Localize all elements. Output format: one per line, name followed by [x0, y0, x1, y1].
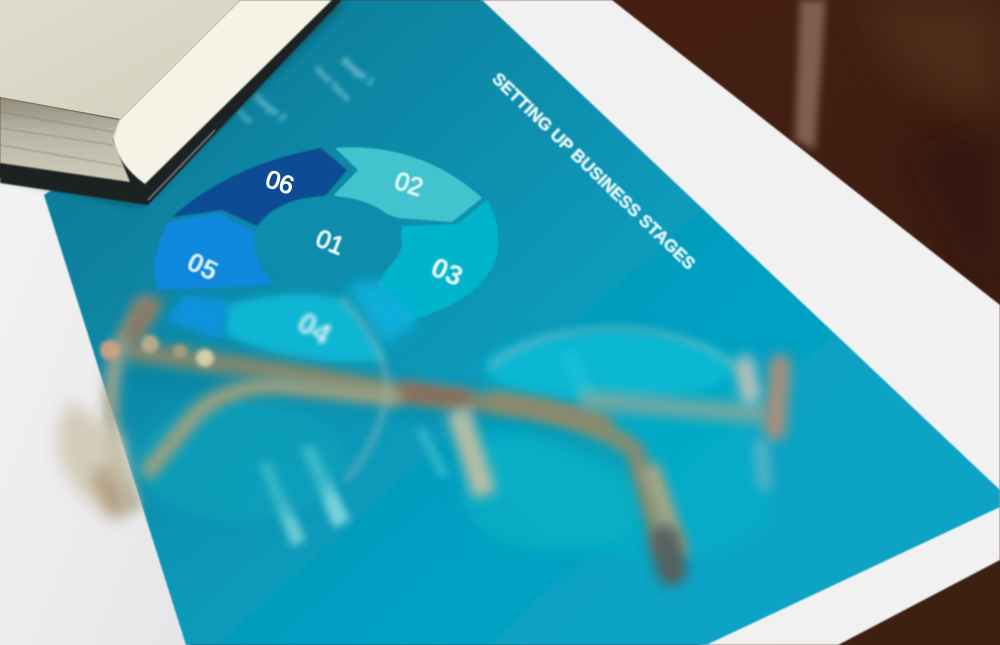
glasses — [58, 298, 780, 580]
pie chart: business stages — [155, 147, 498, 322]
segment 05 — [155, 213, 275, 290]
right lens lower bar — [580, 400, 770, 415]
label 05: 05 — [182, 246, 223, 287]
label 02: 02 — [391, 167, 426, 202]
left white sheet — [0, 178, 190, 645]
left temple arm — [145, 386, 400, 475]
page stack top — [0, 0, 240, 119]
segment 01 centre — [254, 196, 402, 286]
page stack front — [0, 97, 130, 182]
small blurred captions: Stage 1 — [338, 55, 376, 88]
right temple tip — [650, 465, 680, 555]
cover light edge — [148, 130, 215, 200]
page edge side — [113, 0, 332, 184]
rivets — [100, 340, 120, 360]
segment 02 — [334, 147, 482, 222]
small blurred captions: Stage 2 — [250, 91, 288, 124]
book cover — [0, 0, 342, 205]
white paper margin — [300, 0, 1000, 645]
lens left lower tint — [135, 400, 345, 520]
left lens rim — [340, 298, 388, 480]
label 01: 01 — [312, 225, 348, 261]
left temple tip on white sheet — [58, 400, 130, 512]
blurred captions under the glasses — [258, 350, 597, 547]
label 03: 03 — [427, 251, 468, 292]
title: SETTING UP BUSINESS STAGES — [488, 68, 700, 274]
small blurred captions: text — [234, 106, 255, 127]
chart numbers — [182, 165, 468, 352]
label 06: 06 — [262, 165, 297, 200]
small blurred captions — [234, 55, 376, 127]
segment 06 — [172, 148, 347, 226]
book shadow — [0, 0, 345, 208]
small blurred captions: text here — [312, 64, 353, 105]
right temple arm — [490, 400, 665, 555]
lens right tint — [480, 332, 770, 562]
right lens rim — [490, 328, 760, 395]
nose pad — [458, 410, 485, 495]
book — [0, 0, 345, 208]
page lines — [0, 112, 122, 166]
top frame bar — [125, 350, 610, 425]
left hinge and rim — [110, 300, 150, 510]
segment 03 — [378, 200, 498, 322]
segment 04 blurred — [225, 294, 388, 362]
shadow under frame — [130, 375, 670, 580]
label 04: 04 — [291, 306, 337, 352]
right hinge — [775, 365, 780, 430]
